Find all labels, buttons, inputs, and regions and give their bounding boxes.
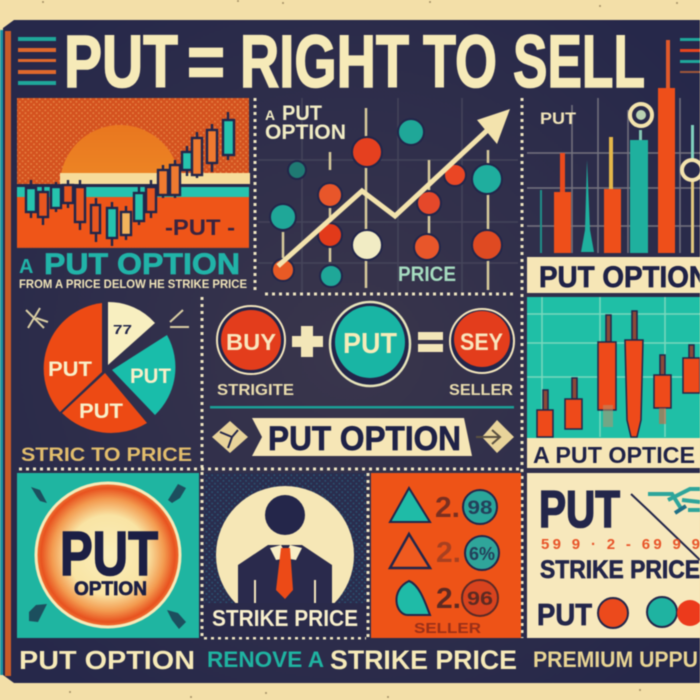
connector stems — [283, 108, 488, 290]
red digits: 59 9 · 2 - 69 9 9 — [541, 536, 700, 553]
button: SEY — [450, 309, 514, 373]
label: PUT large: PUT — [539, 481, 620, 539]
icon: left diamond — [212, 421, 248, 453]
button: PUT — [330, 302, 410, 386]
panel: orange seller list — [371, 473, 521, 638]
grid — [258, 98, 518, 292]
label: PUT small: PUT — [537, 597, 592, 632]
row 3 — [396, 580, 498, 616]
banner: PUT OPTION ribbon: PUT OPTION — [268, 420, 461, 458]
panel: top right candlesticks — [527, 38, 700, 253]
badge text: OPTION — [74, 579, 147, 600]
button: BUY — [217, 306, 285, 374]
row 3: 96 — [467, 589, 493, 610]
title decorative stripes left — [18, 37, 56, 85]
footer: PREMIUM UPPU: PREMIUM UPPU — [533, 647, 698, 672]
pie labels: PUT — [130, 365, 171, 388]
candles — [537, 311, 700, 437]
pie slices — [44, 303, 102, 412]
dotted dividers — [19, 98, 522, 638]
circles — [270, 119, 502, 287]
icon: sun — [61, 124, 174, 174]
label: STRIGITE: STRIGITE — [217, 382, 294, 399]
icon: scissors mark — [26, 308, 48, 328]
pie labels: PUT — [48, 358, 92, 381]
footer labels — [19, 645, 698, 675]
small legend stripes — [680, 38, 700, 73]
label: A PUT OPTION: A — [265, 107, 275, 123]
coin row — [598, 597, 700, 628]
button: SEY: SEY — [460, 329, 503, 356]
label: SELLER: SELLER — [449, 382, 513, 399]
row 1: 2. — [435, 492, 460, 524]
row 3: 2. — [436, 583, 461, 615]
panel: sunset candlestick chart — [17, 98, 250, 248]
panel: pie chart: 77 — [113, 322, 132, 337]
panel: strike price person — [204, 473, 366, 637]
panel: PUT OPTION badge — [17, 473, 199, 638]
pie labels — [48, 358, 171, 423]
row 1 — [390, 488, 497, 524]
panel: buy + put = seller equation — [210, 302, 514, 408]
label: A PUT OPTION: PUT — [282, 102, 322, 125]
heading: A PUT OPTION teal: PUT OPTION — [44, 248, 240, 281]
footer: PUT OPTION: PUT OPTION — [19, 645, 195, 675]
ring markers — [630, 104, 700, 180]
heading: A PUT OPTION teal: A — [19, 256, 33, 278]
panel: pie chart — [21, 302, 192, 466]
title text: = — [187, 20, 225, 103]
row 1: 98 — [468, 498, 492, 519]
button: BUY: BUY — [226, 329, 276, 355]
panel: cream strike price card — [527, 473, 700, 638]
icon: equals — [418, 332, 443, 352]
title — [18, 20, 645, 103]
icon: person — [238, 495, 332, 603]
label: PUT: PUT — [540, 109, 577, 128]
spotlight circle — [215, 485, 355, 604]
panel label -PUT-: -PUT - — [165, 215, 235, 240]
panel: teal candlesticks — [527, 297, 700, 438]
candlesticks — [26, 112, 234, 246]
candles — [540, 40, 694, 253]
title text: PUT — [64, 20, 178, 103]
subheading small text: FROM A PRICE DELOW HE STRIKE PRICE — [19, 277, 247, 291]
arrow: rising line — [278, 109, 510, 266]
row 2: 2. — [436, 537, 461, 569]
label: STRIKE PRICE: STRIKE PRICE — [212, 605, 358, 631]
title text: SELL — [513, 20, 645, 103]
left edge stripes — [0, 30, 11, 676]
label: A PUT OPTION — [265, 102, 346, 144]
footer: RENOVE A: RENOVE A — [207, 647, 324, 672]
grid — [527, 98, 700, 253]
label: PRICE: PRICE — [398, 263, 456, 286]
falling line — [631, 494, 700, 560]
label: A PUT OPTION: OPTION — [265, 121, 346, 144]
title text: RIGHT — [240, 20, 409, 103]
footer: STRIKE PRICE: STRIKE PRICE — [330, 645, 517, 675]
icon: corner stars — [29, 484, 186, 629]
pie labels: PUT — [79, 400, 123, 423]
banner: A PUT OPTICE: A PUT OPTICE — [533, 442, 695, 468]
grid — [527, 297, 700, 437]
panel: option price chart — [258, 98, 518, 292]
button: PUT: PUT — [343, 328, 397, 360]
title text: TO — [423, 20, 497, 103]
icon: right diamond — [476, 420, 514, 453]
label: SELLER: SELLER — [414, 620, 481, 637]
badge circle — [36, 483, 180, 627]
icon: plus — [292, 326, 323, 357]
label: STRIC TO PRICE: STRIC TO PRICE — [21, 445, 192, 466]
icon: slash mark — [170, 310, 189, 327]
title text — [64, 20, 645, 103]
row 2: 6% — [469, 544, 495, 564]
teal glyph mark — [648, 489, 700, 513]
badge text: PUT — [60, 520, 158, 589]
row 2 — [390, 534, 499, 570]
